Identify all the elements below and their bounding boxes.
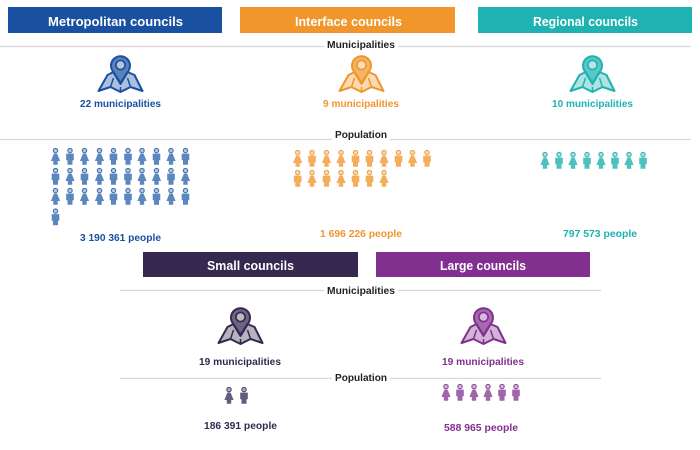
header: Large councils: Large councils: [440, 259, 526, 273]
icon: large councils map pin: [462, 308, 506, 344]
text: 1 696 226 people: 1 696 226 people: [320, 229, 402, 240]
header: Small councils: [143, 252, 358, 277]
icon: interface map pin: [340, 56, 384, 92]
header: Interface councils: Interface councils: [295, 15, 402, 29]
text: 9 municipalities: 9 municipalities: [323, 99, 399, 110]
icon: small councils map pin: [218, 308, 262, 344]
header: Large councils: [376, 252, 590, 277]
header: Interface councils: [240, 7, 455, 33]
pictogram: interface population: [293, 150, 431, 187]
header: Small councils: Small councils: [207, 259, 294, 273]
header: Metropolitan councils: [8, 7, 222, 33]
heading: Population (top): Population: [335, 130, 387, 141]
text: 797 573 people: 797 573 people: [563, 229, 637, 240]
divider lines: [0, 46, 691, 378]
pictogram: large councils population: [441, 384, 520, 401]
text: 3 190 361 people: 3 190 361 people: [80, 233, 161, 244]
text: 19 municipalities (small): 19 municipalities: [199, 357, 281, 368]
text: 186 391 people: 186 391 people: [204, 421, 277, 432]
pictogram: metropolitan population: [51, 148, 190, 225]
icon: regional map pin: [570, 56, 614, 92]
text: 10 municipalities: 10 municipalities: [552, 99, 633, 110]
header: Regional councils: [478, 7, 692, 33]
header: Regional councils: Regional councils: [533, 15, 638, 29]
icon: metropolitan map pin: [98, 56, 142, 92]
text: 22 municipalities: 22 municipalities: [80, 99, 161, 110]
heading: Population (bottom): Population: [335, 373, 387, 384]
text: 588 965 people: 588 965 people: [444, 423, 518, 434]
pictogram: small councils population: [224, 387, 248, 404]
pictogram: regional population: [540, 152, 647, 169]
heading: Municipalities (bottom): Municipalities: [327, 286, 395, 297]
heading: Municipalities (top): Municipalities: [327, 40, 395, 51]
header: Metropolitan councils: Metropolitan councils: [48, 15, 183, 29]
text: 19 municipalities (large): 19 municipalities: [442, 357, 524, 368]
